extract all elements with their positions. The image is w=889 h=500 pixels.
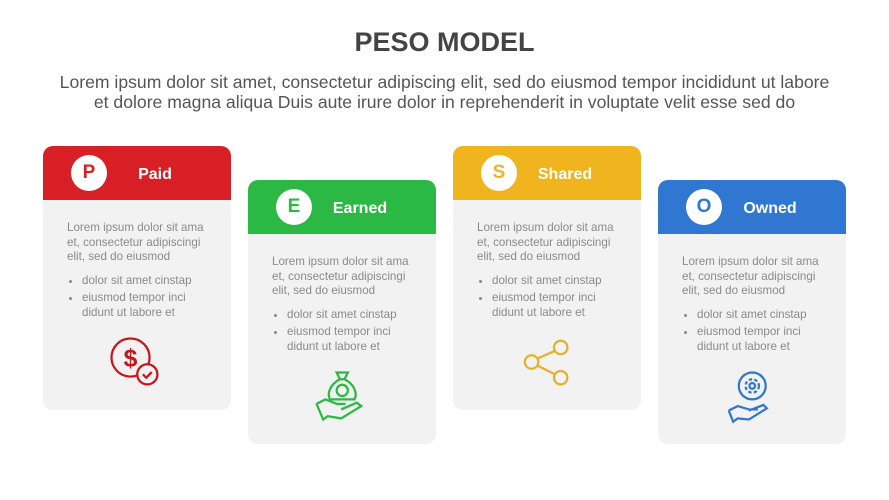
panel: earned: didunt ut labore et [287, 340, 380, 352]
panel: earned: dolor sit amet cinstap [287, 308, 397, 320]
panel: earned: et, consectetur adipiscingi [272, 270, 405, 282]
panel: owned [658, 180, 846, 444]
panel: owned: Owned [743, 200, 797, 217]
panel: shared: elit, sed do eiusmod [477, 250, 580, 263]
subtitle [60, 72, 829, 112]
panel: paid: et, consectetur adipiscingi [67, 236, 200, 248]
panel: owned: Lorem ipsum dolor sit ama [682, 255, 819, 268]
panel: paid: Paid [138, 166, 172, 183]
panel: paid: elit, sed do eiusmod [67, 250, 170, 263]
icon: gear hand [728, 371, 768, 424]
panel: shared: Lorem ipsum dolor sit ama [477, 221, 614, 234]
panel: shared: eiusmod tempor inci [492, 291, 596, 304]
icon: share [524, 340, 568, 386]
panel: paid: eiusmod tempor inci [82, 291, 186, 304]
panel: earned: eiusmod tempor inci [287, 325, 391, 338]
panel: paid: didunt ut labore et [82, 306, 175, 318]
panel: owned: et, consectetur adipiscingi [682, 270, 815, 282]
panel: shared [453, 146, 641, 410]
icon: money bag hand [316, 371, 364, 422]
panel: shared: Shared [538, 166, 592, 183]
panel: earned: Lorem ipsum dolor sit ama [272, 255, 409, 268]
panel: owned: O [697, 196, 711, 217]
panel: earned [248, 180, 436, 444]
panel: owned: elit, sed do eiusmod [682, 284, 785, 297]
panel: earned: E [288, 196, 300, 217]
panel: earned: elit, sed do eiusmod [272, 284, 375, 297]
panel: shared: didunt ut labore et [492, 306, 585, 318]
panel: shared: et, consectetur adipiscingi [477, 236, 610, 248]
panel: shared: S [493, 162, 505, 183]
panel: owned: didunt ut labore et [697, 340, 790, 352]
panel: owned: eiusmod tempor inci [697, 325, 801, 338]
icon: dollar check [110, 337, 158, 386]
panel: shared: dolor sit amet cinstap [492, 274, 602, 286]
title: PESO MODEL [354, 27, 535, 57]
panel: paid: dolor sit amet cinstap [82, 274, 192, 286]
panel: paid: P [83, 162, 95, 183]
panel: paid: Lorem ipsum dolor sit ama [67, 221, 204, 234]
icon: dollar check: $ [124, 345, 138, 372]
subtitle: et dolore magna aliqua Duis aute irure dolor in reprehenderit in voluptate velit esse sed do [94, 92, 795, 112]
panel: earned: Earned [333, 200, 387, 217]
panel: owned: dolor sit amet cinstap [697, 308, 807, 320]
panel: paid [43, 146, 231, 410]
subtitle: Lorem ipsum dolor sit amet, consectetur adipiscing elit, sed do eiusmod tempor incididunt ut labore [60, 72, 829, 92]
